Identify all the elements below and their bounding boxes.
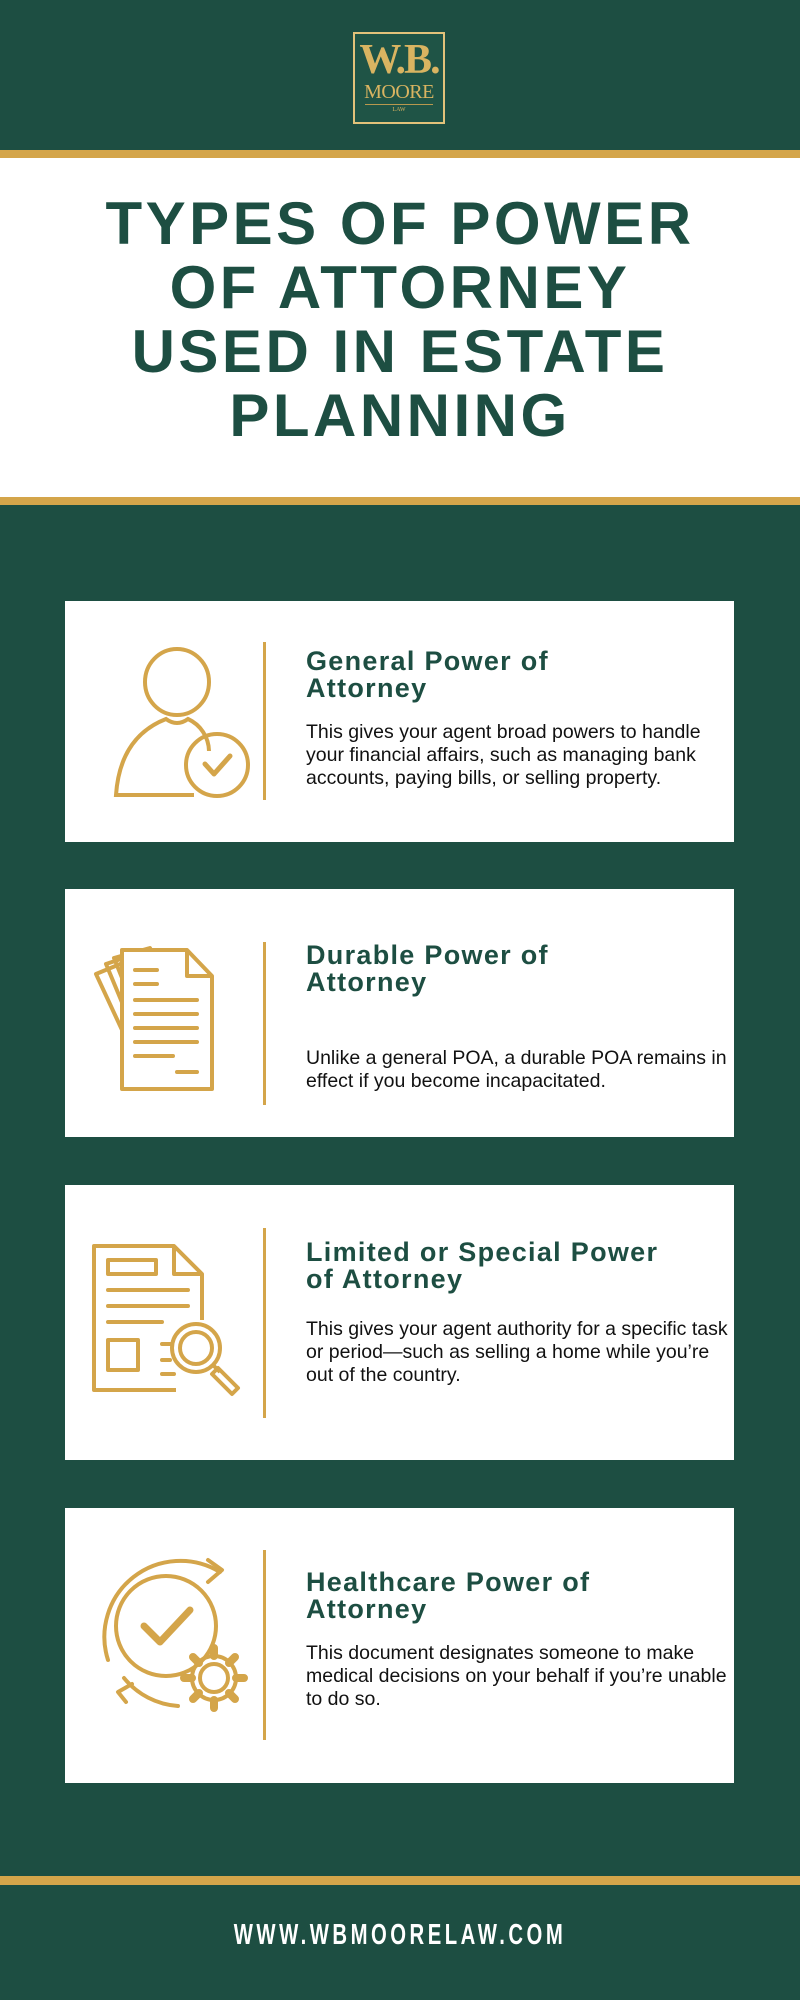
icon: check with gear xyxy=(102,1558,248,1712)
heading: Attorney xyxy=(306,1594,427,1624)
panel: durable POA xyxy=(65,889,734,1137)
gold bar under title xyxy=(0,497,800,505)
header band xyxy=(0,0,800,150)
title panel xyxy=(0,158,800,497)
logo: MOORE xyxy=(364,81,434,103)
heading: Attorney xyxy=(306,673,427,703)
panel: healthcare POA xyxy=(65,1508,734,1783)
text: medical decisions on your behalf if you’re unable xyxy=(306,1665,727,1687)
text xyxy=(306,1047,727,1092)
icon: document with magnifier xyxy=(92,1244,240,1396)
heading: Attorney xyxy=(306,967,427,997)
text xyxy=(306,1318,728,1386)
logo: W.B. xyxy=(359,37,439,83)
text xyxy=(306,721,701,789)
logo xyxy=(353,32,445,124)
title: PLANNING xyxy=(229,382,571,449)
text: or period—such as selling a home while you’re xyxy=(306,1341,709,1363)
icon: documents xyxy=(94,946,214,1091)
gold bar top xyxy=(0,150,800,158)
text: Unlike a general POA, a durable POA remains in xyxy=(306,1047,727,1069)
heading xyxy=(306,940,549,997)
heading: of Attorney xyxy=(306,1264,463,1294)
heading xyxy=(306,1237,658,1294)
text: This document designates someone to make xyxy=(306,1642,694,1664)
title xyxy=(105,190,695,449)
panel: limited POA xyxy=(65,1185,734,1460)
logo: LAW xyxy=(392,107,406,113)
text: This gives your agent broad powers to handle xyxy=(306,721,701,743)
heading: Limited or Special Power xyxy=(306,1237,658,1267)
text: out of the country. xyxy=(306,1364,461,1386)
text: effect if you become incapacitated. xyxy=(306,1070,606,1092)
panel: general POA xyxy=(65,601,734,842)
title: USED IN ESTATE xyxy=(132,318,668,385)
text: This gives your agent authority for a specific task xyxy=(306,1318,728,1340)
title: OF ATTORNEY xyxy=(170,254,630,321)
heading: Durable Power of xyxy=(306,940,549,970)
heading: Healthcare Power of xyxy=(306,1567,590,1597)
title: TYPES OF POWER xyxy=(105,190,695,257)
gold bar bottom xyxy=(0,1876,800,1885)
text: your financial affairs, such as managing bank xyxy=(306,744,696,766)
icon: person with check xyxy=(114,647,250,798)
heading xyxy=(306,646,549,703)
text: accounts, paying bills, or selling property. xyxy=(306,767,661,789)
heading xyxy=(306,1567,590,1624)
text: to do so. xyxy=(306,1688,381,1710)
text xyxy=(306,1642,727,1710)
footer url: WWW.WBMOORELAW.COM xyxy=(234,1919,566,1951)
heading: General Power of xyxy=(306,646,549,676)
